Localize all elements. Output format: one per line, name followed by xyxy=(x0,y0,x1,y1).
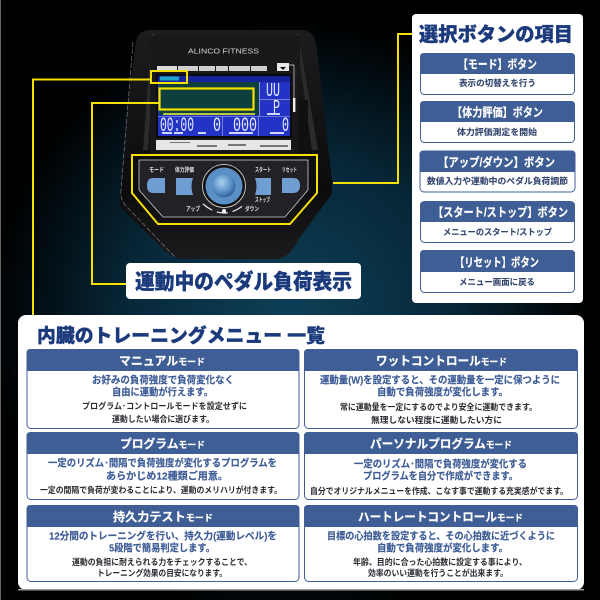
LCD digits: UU xyxy=(266,80,280,102)
card: manual mode: 運動したい場合に選びます。 xyxy=(112,413,214,424)
lower display legend xyxy=(156,140,291,150)
card: manual mode xyxy=(26,349,300,428)
card: manual mode: お好みの負荷強度で負荷変化なく xyxy=(92,374,234,386)
card: mode button: 表示の切替えを行う xyxy=(459,77,536,88)
card: heart rate control mode xyxy=(304,505,578,582)
LCD digits: 0 xyxy=(213,115,221,138)
card: reset button: メニュー画面に戻る xyxy=(459,277,535,287)
card: watt control mode: 自動で負荷強度が変化します。 xyxy=(377,386,508,398)
card: endurance test mode: 12分間のトレーニングを行い、持久力(運動レベル)を xyxy=(49,530,277,542)
card: personal program mode xyxy=(304,432,578,500)
card: start/stop button: メニューのスタート/ストップ xyxy=(443,226,552,237)
card: heart rate control mode: 目標の心拍数を設定すると、その心拍数に近づくように xyxy=(327,530,555,542)
LCD digits: 00:00 xyxy=(160,115,194,138)
evaluation button xyxy=(176,178,193,195)
LCD digits xyxy=(160,80,289,138)
card: watt control mode: 運動量(W)を設定すると、その運動量を一定に保つように xyxy=(320,374,560,386)
card: program mode xyxy=(26,432,300,500)
LCD digits: 0 xyxy=(282,115,289,138)
card: endurance test mode: 運動の負担に耐えられる力をチェックすることで、 xyxy=(72,556,252,567)
card: fitness evaluation button: 【体力評価】ボタン xyxy=(452,104,543,120)
card: heart rate control mode: ハートレートコントロールモード xyxy=(358,510,523,524)
card: endurance test mode: 5段階で簡易判定します。 xyxy=(109,542,215,554)
card: personal program mode: 自分でオリジナルメニューを作成、こなす事で運動する充実感がでます。 xyxy=(310,485,568,496)
brand name: ALINCO FITNESS xyxy=(188,48,259,56)
card: program mode: プログラムモード xyxy=(120,436,205,451)
connector: pedal load box to label xyxy=(92,103,159,284)
card: reset button: 【リセット】ボタン xyxy=(455,256,539,270)
button labels xyxy=(149,166,297,213)
button labels: アップ xyxy=(186,206,200,213)
connector: display to menu panel xyxy=(33,80,151,316)
card: heart rate control mode: 年齢、目的に合った心拍数に設定する事により、 xyxy=(353,556,527,567)
yellow highlight: display mode box xyxy=(151,71,187,83)
mode button xyxy=(147,178,165,193)
card: up/down button xyxy=(420,150,576,192)
callout: pedal load label: 運動中のペダル負荷表示 xyxy=(135,270,352,294)
card: watt control mode: ワットコントロールモード xyxy=(376,354,507,368)
card: manual mode: マニュアルモード xyxy=(119,354,205,368)
card: reset button xyxy=(420,250,575,292)
button labels: スタート xyxy=(255,166,271,174)
button labels: 体力評価 xyxy=(175,166,194,174)
card: fitness evaluation button xyxy=(420,101,575,142)
card: personal program mode: パーソナルプログラムモード xyxy=(370,436,512,451)
card: mode button xyxy=(420,53,575,94)
card: fitness evaluation button: 体力評価測定を開始 xyxy=(457,126,537,137)
card: endurance test mode xyxy=(26,505,300,582)
card: manual mode: 自由に運動が行えます。 xyxy=(112,386,213,398)
card: heart rate control mode: 効率のいい運動を行うことが出来ます。 xyxy=(368,567,508,578)
button labels: リセット xyxy=(282,167,297,174)
heading: training menu list: 内臓のトレーニングメニュー 一覧 xyxy=(37,324,325,347)
button labels: ダウン xyxy=(245,205,259,213)
console unit xyxy=(120,30,332,259)
card: up/down button: 【アップ/ダウン】ボタン xyxy=(438,154,555,170)
card: mode button: 【モード】ボタン xyxy=(458,58,537,72)
LCD digits: P xyxy=(273,97,280,119)
reset button xyxy=(282,178,300,193)
card: start/stop button xyxy=(420,202,575,242)
yellow highlight: pedal load box xyxy=(160,88,254,110)
card: watt control mode xyxy=(304,349,578,428)
dial xyxy=(202,164,246,213)
callout: pedal load label xyxy=(126,263,361,299)
card: program mode: あらかじめ12種類ご用意。 xyxy=(106,470,228,482)
heading: selection buttons: 選択ボタンの項目 xyxy=(419,24,573,46)
panel: training menu list xyxy=(18,315,584,590)
LCD display xyxy=(156,74,292,138)
button panel xyxy=(139,160,308,217)
card: up/down button: 数値入力や運動中のペダル負荷調節 xyxy=(427,175,568,186)
LCD digits: 000 xyxy=(233,115,257,138)
connector: button panel to button list xyxy=(333,34,412,183)
card: watt control mode: 常に運動量を一定にするのでより安全に運動できます。 xyxy=(340,401,537,412)
card: program mode: 一定の間隔で負荷が変わることにより、運動のメリハリが付きます。 xyxy=(40,484,282,495)
card: endurance test mode: トレーニング効果の目安になります。 xyxy=(97,567,227,578)
yellow highlight: button panel outline xyxy=(132,155,317,224)
card: personal program mode: プログラムを自分で作成ができます。 xyxy=(363,470,518,482)
panel: selection buttons xyxy=(412,14,583,303)
start button xyxy=(255,178,271,195)
mode tabs above display xyxy=(157,63,295,112)
button labels: ストップ xyxy=(255,197,270,204)
card: program mode: 一定のリズム･間隔で負荷強度が変化するプログラムを xyxy=(48,456,277,470)
card: watt control mode: 無理しない程度に運動したい方に xyxy=(371,414,502,425)
button labels: モード xyxy=(149,167,164,174)
card: start/stop button: 【スタート/ストップ】ボタン xyxy=(433,206,568,220)
card: heart rate control mode: 自動で負荷強度が変化します。 xyxy=(377,542,508,554)
card: endurance test mode: 持久力テストモード xyxy=(113,509,213,524)
card: manual mode: プログラム･コントロールモードを設定せずに xyxy=(82,400,247,411)
card: personal program mode: 一定のリズム･間隔で負荷強度が変化する xyxy=(354,458,527,470)
LCD small captions xyxy=(162,113,284,134)
